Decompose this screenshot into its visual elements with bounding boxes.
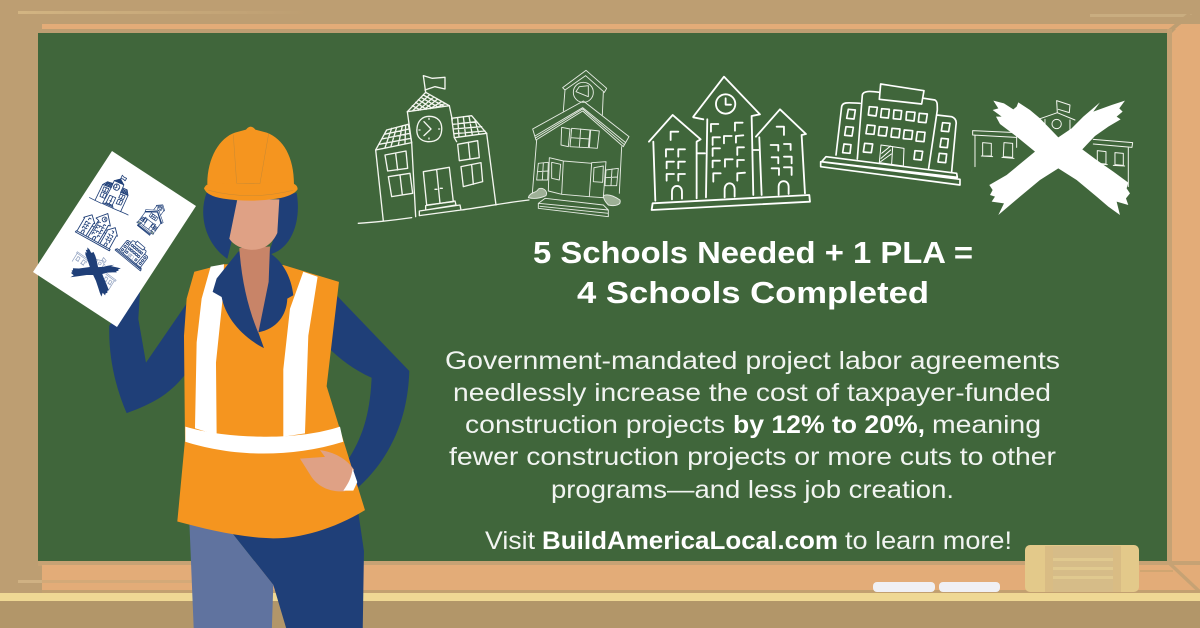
call to action (485, 527, 1012, 555)
sleeve cuff (343, 469, 357, 491)
vest reflective strips (185, 264, 343, 454)
headline (533, 235, 973, 310)
frame top right highlight (1090, 14, 1192, 17)
frame corner mitre top (1167, 14, 1190, 33)
mini school 3 (75, 204, 126, 253)
body paragraph: meaning (932, 411, 1041, 439)
held paper with school sketches (33, 151, 196, 327)
headline: 5 Schools Needed + 1 PLA = (533, 235, 973, 270)
body paragraph: Government-mandated project labor agreements (445, 347, 1060, 375)
body paragraph: construction projects (465, 411, 725, 439)
mini school 1 (89, 167, 144, 220)
mini school 4 (113, 234, 153, 271)
school drawings row (358, 70, 1133, 223)
frame inner right edge (1167, 29, 1172, 564)
headline: 4 Schools Completed (577, 275, 929, 310)
frame right peach moulding (1167, 24, 1200, 595)
hard hat (204, 127, 298, 201)
call to action: to learn more! (845, 527, 1012, 555)
blazer collar (213, 252, 293, 348)
body paragraph: needlessly increase the cost of taxpayer-funded (453, 379, 1051, 407)
body paragraph: programs—and less job creation. (551, 476, 954, 504)
chalkboard (38, 33, 1167, 561)
school 5 crossed out (973, 101, 1133, 215)
chalk pieces (873, 582, 1000, 592)
school 3 three towers (649, 77, 810, 210)
frame top peach moulding (42, 24, 1180, 29)
school 1 with flag (358, 76, 529, 223)
frame top highlight streak (18, 11, 308, 14)
neck (239, 246, 270, 333)
mini school 5 with navy X (64, 244, 123, 299)
body paragraph (445, 347, 1060, 504)
mini school 2 (134, 198, 171, 238)
eraser (1025, 545, 1139, 592)
arm on hip (328, 294, 409, 489)
construction worker figure (109, 127, 409, 628)
chalk tray (0, 561, 1200, 628)
raised arm (109, 292, 190, 413)
school 2 with bell tower (528, 70, 629, 217)
face (229, 199, 279, 250)
call to action: BuildAmericaLocal.com (542, 527, 838, 555)
call to action: Visit (485, 527, 535, 555)
pants light leg (189, 521, 273, 628)
body paragraph: by 12% to 20%, (733, 411, 925, 439)
hair (203, 193, 298, 259)
pants navy leg (231, 512, 364, 628)
hand on hip (300, 450, 354, 491)
school 4 office style (821, 84, 960, 185)
paper sheet (33, 151, 196, 327)
safety vest (177, 264, 365, 538)
body paragraph: fewer construction projects or more cuts to other (449, 443, 1056, 471)
